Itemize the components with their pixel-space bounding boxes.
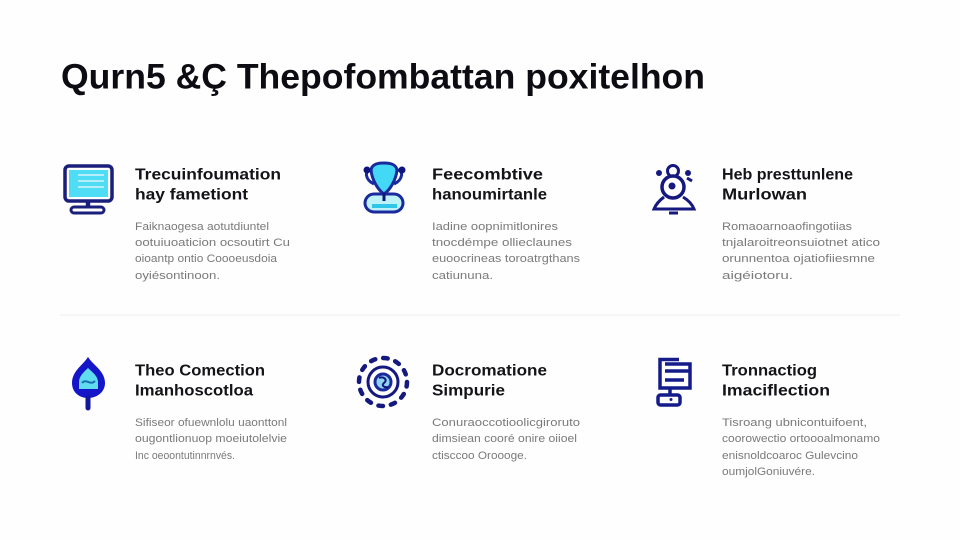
text block: enisnoldcoaroc Gulevcino <box>722 450 858 462</box>
heading <box>135 166 281 204</box>
text block: ootuiuoaticion ocsoutirt Cu <box>135 237 290 249</box>
text block <box>432 417 580 462</box>
heading: Theo Comection <box>135 362 265 380</box>
icon: document stack <box>658 360 690 405</box>
text block: Sifiseor ofuewnlolu uaonttonl <box>135 417 287 429</box>
heading: Murlowan <box>722 186 807 204</box>
icon: water drop <box>72 357 105 408</box>
panel: card 5 <box>359 358 580 462</box>
text block: Conuraoccotioolicgiroruto <box>432 417 580 429</box>
text block: ctisccoo Oroooge. <box>432 450 527 462</box>
text block: oumjolGoniuvére. <box>722 466 815 478</box>
panel: card 6 <box>658 360 880 478</box>
text block: Iadine oopnimitlonires <box>432 221 559 233</box>
panel: card 2 <box>364 163 581 282</box>
heading <box>432 362 547 400</box>
text block: Inc oeoontutinnrnvés. <box>135 450 235 462</box>
title: Qurn5 &Ç Thepofombattan poxitelhon <box>61 58 705 96</box>
text block: oioantp ontio Coooeusdoia <box>135 253 278 265</box>
panel: card 3 <box>654 166 880 282</box>
heading: Imanhoscotloa <box>135 382 253 400</box>
text block: ougontlionuop moeiutolelvie <box>135 433 287 445</box>
panel: card 1 <box>65 166 290 282</box>
text block <box>722 221 880 282</box>
heading: Imaciflection <box>722 382 830 400</box>
heading: hanoumirtanle <box>432 186 547 204</box>
text block: dimsiean cooré onire oiioel <box>432 433 577 445</box>
heading: hay fametiont <box>135 186 249 204</box>
text block <box>432 221 581 282</box>
text block: aigéiotoru. <box>722 270 793 282</box>
icon: trophy <box>364 163 406 212</box>
heading <box>135 362 265 400</box>
heading: Heb presttunlene <box>722 166 853 184</box>
heading: Simpurie <box>432 382 505 400</box>
text block: tnjalaroitreonsuiotnet atico <box>722 237 880 249</box>
text block: catiununa. <box>432 270 493 282</box>
heading <box>432 166 547 204</box>
heading: Tronnactiog <box>722 362 817 380</box>
text block <box>135 417 287 462</box>
heading <box>722 362 830 400</box>
text block: coorowectio ortoooalmonamo <box>722 433 880 445</box>
heading: Trecuinfoumation <box>135 166 281 184</box>
text block: tnocdémpe ollieclaunes <box>432 237 573 249</box>
icon: bell figure <box>654 166 694 213</box>
text block: Tisroang ubnicontuifoent, <box>722 417 867 429</box>
text block <box>135 221 290 282</box>
heading <box>722 166 853 204</box>
text block: orunnentoa ojatiofiiesmne <box>722 253 875 265</box>
panel: card 4 <box>72 357 287 462</box>
text block: Romaoarnoaofingotiias <box>722 221 853 233</box>
heading: Docromatione <box>432 362 547 380</box>
icon: computer monitor <box>65 166 112 213</box>
text block: euoocrineas toroatrgthans <box>432 253 581 265</box>
text block <box>722 417 880 478</box>
icon: dashed target <box>359 358 407 406</box>
heading: Feecombtive <box>432 166 543 184</box>
text block: oyiésontinoon. <box>135 270 220 282</box>
text block: Faiknaogesa aotutdiuntel <box>135 221 269 233</box>
